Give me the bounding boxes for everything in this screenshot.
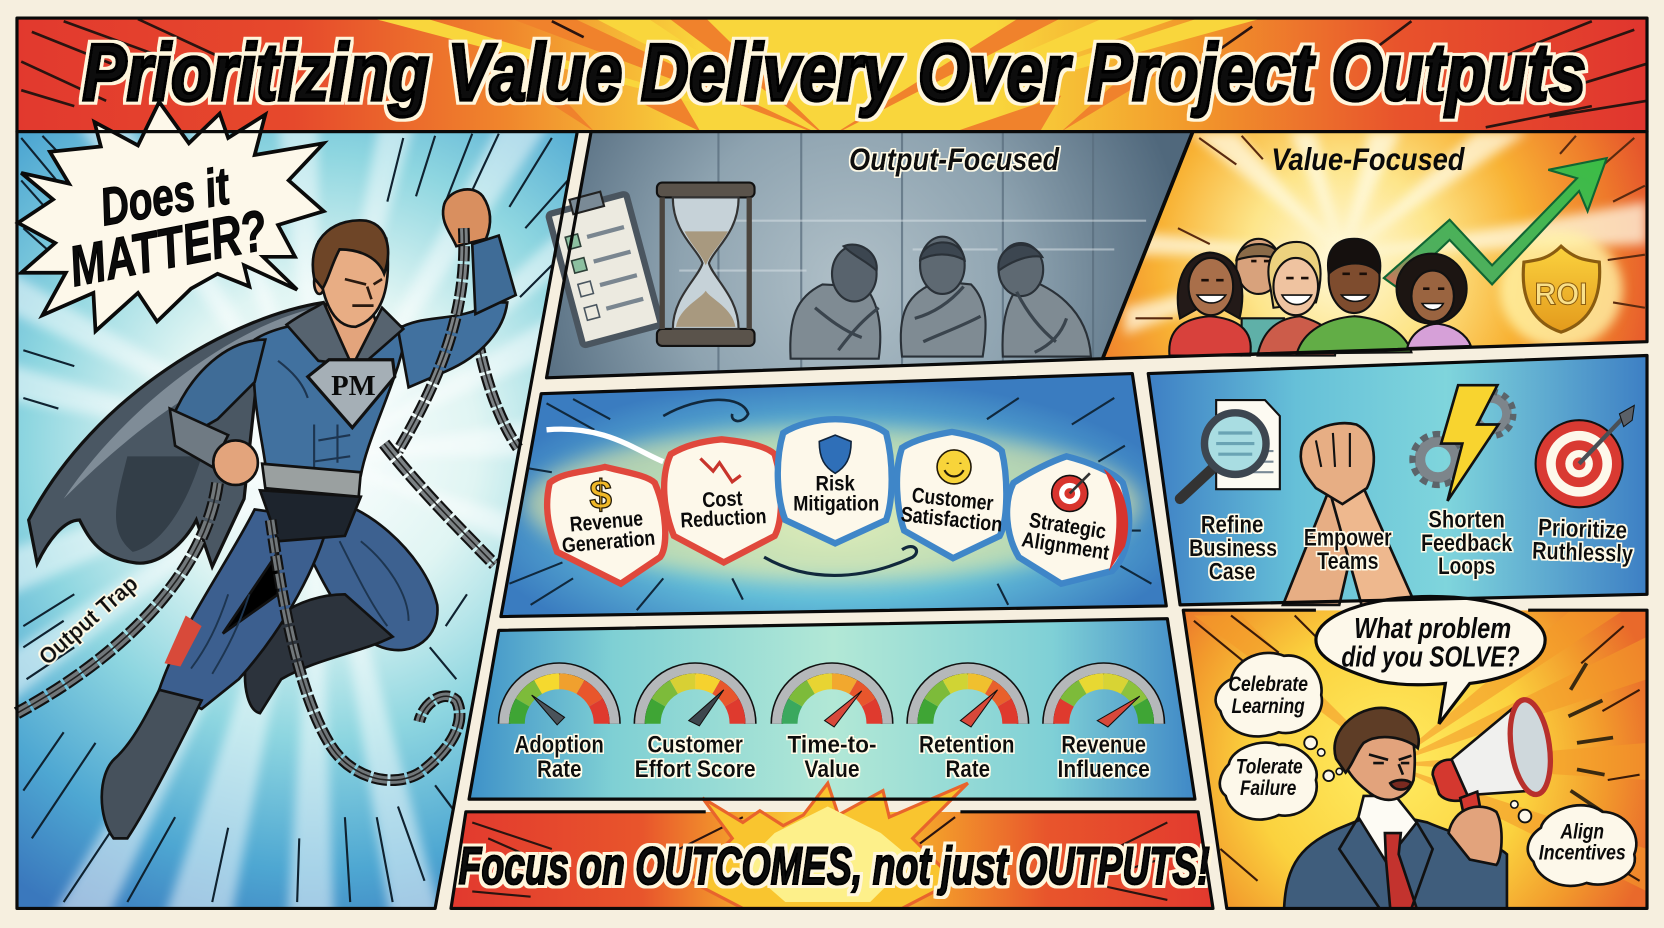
speech bubble	[1316, 596, 1545, 724]
label: Empower Teams	[1304, 524, 1392, 575]
label: Adoption Rate	[515, 731, 604, 783]
speech text: did you SOLVE?	[1341, 641, 1520, 673]
icon: ROI shield	[1523, 246, 1600, 332]
panel: value types	[499, 371, 1167, 621]
panel: bottom banner	[451, 783, 1215, 909]
icon: megaphone	[1433, 697, 1556, 865]
hero: torso	[254, 320, 409, 541]
icon: ROI shield: ROI	[1535, 276, 1588, 312]
icon: target	[1052, 473, 1090, 512]
label: Alignment	[1020, 528, 1111, 565]
icon: empower teams fists	[1283, 423, 1416, 605]
label: Shorten Feedback Loops: Loops	[1438, 553, 1495, 580]
starburst	[690, 783, 968, 908]
label: Prioritize Ruthlessly	[1532, 514, 1634, 568]
label: Prioritize Ruthlessly: Ruthlessly	[1532, 538, 1634, 568]
icon: hourglass	[657, 183, 755, 346]
gauge: Time-to-Value	[777, 669, 887, 727]
icon: magnifier over document	[1180, 400, 1280, 499]
label: Retention Rate: Retention	[919, 731, 1015, 758]
label: Generation	[561, 527, 656, 558]
label: Prioritize Ruthlessly: Prioritize	[1538, 514, 1628, 545]
icon: bullseye target	[1536, 405, 1634, 507]
label: Strategic	[1027, 509, 1108, 544]
burst text: Does it: Does it	[96, 157, 235, 237]
label: Customer Effort Score: Effort Score	[635, 756, 756, 783]
icon: dollar: $	[589, 471, 612, 517]
label: Time-to-Value: Value	[804, 756, 860, 783]
panel: hero breaking the output trap	[14, 133, 576, 907]
badge: Strategic Alignment	[1007, 456, 1129, 584]
hero: straight leg and boot	[102, 509, 329, 838]
panel: Output-Focused	[541, 132, 1199, 381]
figures: happy team	[1169, 239, 1471, 356]
hero: raised arm and fist	[398, 189, 516, 387]
burst text: MATTER?: MATTER?	[64, 198, 272, 299]
label: Reduction	[680, 505, 767, 533]
hero: PM emblem: PM	[331, 370, 376, 402]
label: Adoption Rate: Rate	[537, 756, 582, 783]
hero: PM emblem	[308, 360, 395, 428]
label: Shorten Feedback Loops: Feedback	[1421, 530, 1513, 557]
label: Revenue Influence: Revenue	[1061, 731, 1146, 758]
speech text: What problem	[1354, 613, 1511, 645]
hero: bent leg and boot	[245, 499, 437, 713]
thought: Tolerate Failure	[1220, 743, 1342, 820]
label: Shorten Feedback Loops	[1421, 506, 1513, 580]
label: Mitigation	[793, 492, 879, 515]
label: Revenue Influence	[1058, 731, 1150, 783]
label: Risk	[816, 472, 855, 495]
label: Customer Effort Score: Customer	[647, 731, 743, 758]
gauge: Adoption Rate	[504, 669, 614, 725]
thought: Align Incentives	[1511, 801, 1636, 886]
cape	[29, 302, 324, 567]
label: Retention Rate: Rate	[946, 756, 990, 783]
label: Revenue	[569, 507, 644, 537]
heading: Value-Focused	[1271, 141, 1465, 177]
icon: shield	[819, 435, 851, 473]
label: Shorten Feedback Loops: Shorten	[1428, 506, 1505, 533]
label: Empower Teams: Teams	[1317, 548, 1379, 575]
label: Satisfaction	[900, 503, 1003, 537]
badge: Revenue Generation	[547, 467, 665, 584]
label: Refine Business Case: Case	[1209, 558, 1255, 585]
icon: falling zigzag	[700, 458, 741, 482]
callout: Does it MATTER? burst	[18, 102, 324, 331]
gauge: Retention Rate	[913, 669, 1023, 727]
thought text: Align	[1560, 820, 1604, 843]
chains behind hero	[478, 340, 518, 448]
icon: rising green arrow	[1384, 158, 1607, 289]
gauge: Revenue Influence	[1048, 669, 1159, 727]
icon: smiley	[937, 450, 971, 484]
label: Customer	[911, 484, 994, 515]
swooshes	[547, 400, 917, 575]
label: Refine Business Case: Business	[1189, 535, 1277, 562]
label: Cost	[702, 487, 743, 512]
label: Time-to-Value	[787, 731, 877, 783]
label: Revenue Influence: Influence	[1058, 756, 1150, 783]
badge: Risk Mitigation	[778, 419, 892, 543]
label: Output Trap: Output Trap	[34, 570, 143, 670]
gauge: Customer Effort Score	[640, 669, 750, 726]
panel: title banner	[17, 18, 1647, 138]
hero: head	[287, 220, 403, 368]
panel: leader with megaphone	[1178, 596, 1650, 913]
badge: Cost Reduction	[664, 439, 781, 562]
icon: lightning bolt and gears	[1412, 385, 1513, 501]
label: Time-to-Value: Time-to-	[787, 731, 877, 758]
panel: strategies	[1146, 356, 1647, 605]
figures: three dejected workers	[790, 237, 1091, 359]
icon: clipboard checklist	[546, 185, 661, 346]
thought text: Learning	[1232, 695, 1305, 718]
heading: Output-Focused	[849, 141, 1060, 177]
panel: Value-Focused	[1103, 132, 1647, 360]
label: Refine Business Case: Refine	[1201, 512, 1263, 539]
hero: left arm and fist	[170, 340, 265, 485]
broken chains	[17, 228, 495, 780]
label: Empower Teams: Empower	[1304, 524, 1392, 551]
badge: Customer Satisfaction	[897, 432, 1006, 558]
thought: Celebrate Learning	[1216, 653, 1325, 756]
label: Refine Business Case	[1189, 512, 1277, 585]
leader figure	[1284, 708, 1507, 908]
panel: metrics gauges	[467, 616, 1199, 801]
thought text: Celebrate	[1228, 673, 1308, 696]
label: Retention Rate	[919, 731, 1015, 783]
label: Adoption Rate: Adoption	[515, 731, 604, 758]
thought text: Tolerate	[1236, 756, 1303, 779]
thought text: Incentives	[1539, 842, 1626, 865]
slogan: Focus on OUTCOMES, not just OUTPUTS!	[458, 837, 1210, 896]
thought text: Failure	[1240, 777, 1296, 800]
label: Customer Effort Score	[635, 731, 756, 783]
